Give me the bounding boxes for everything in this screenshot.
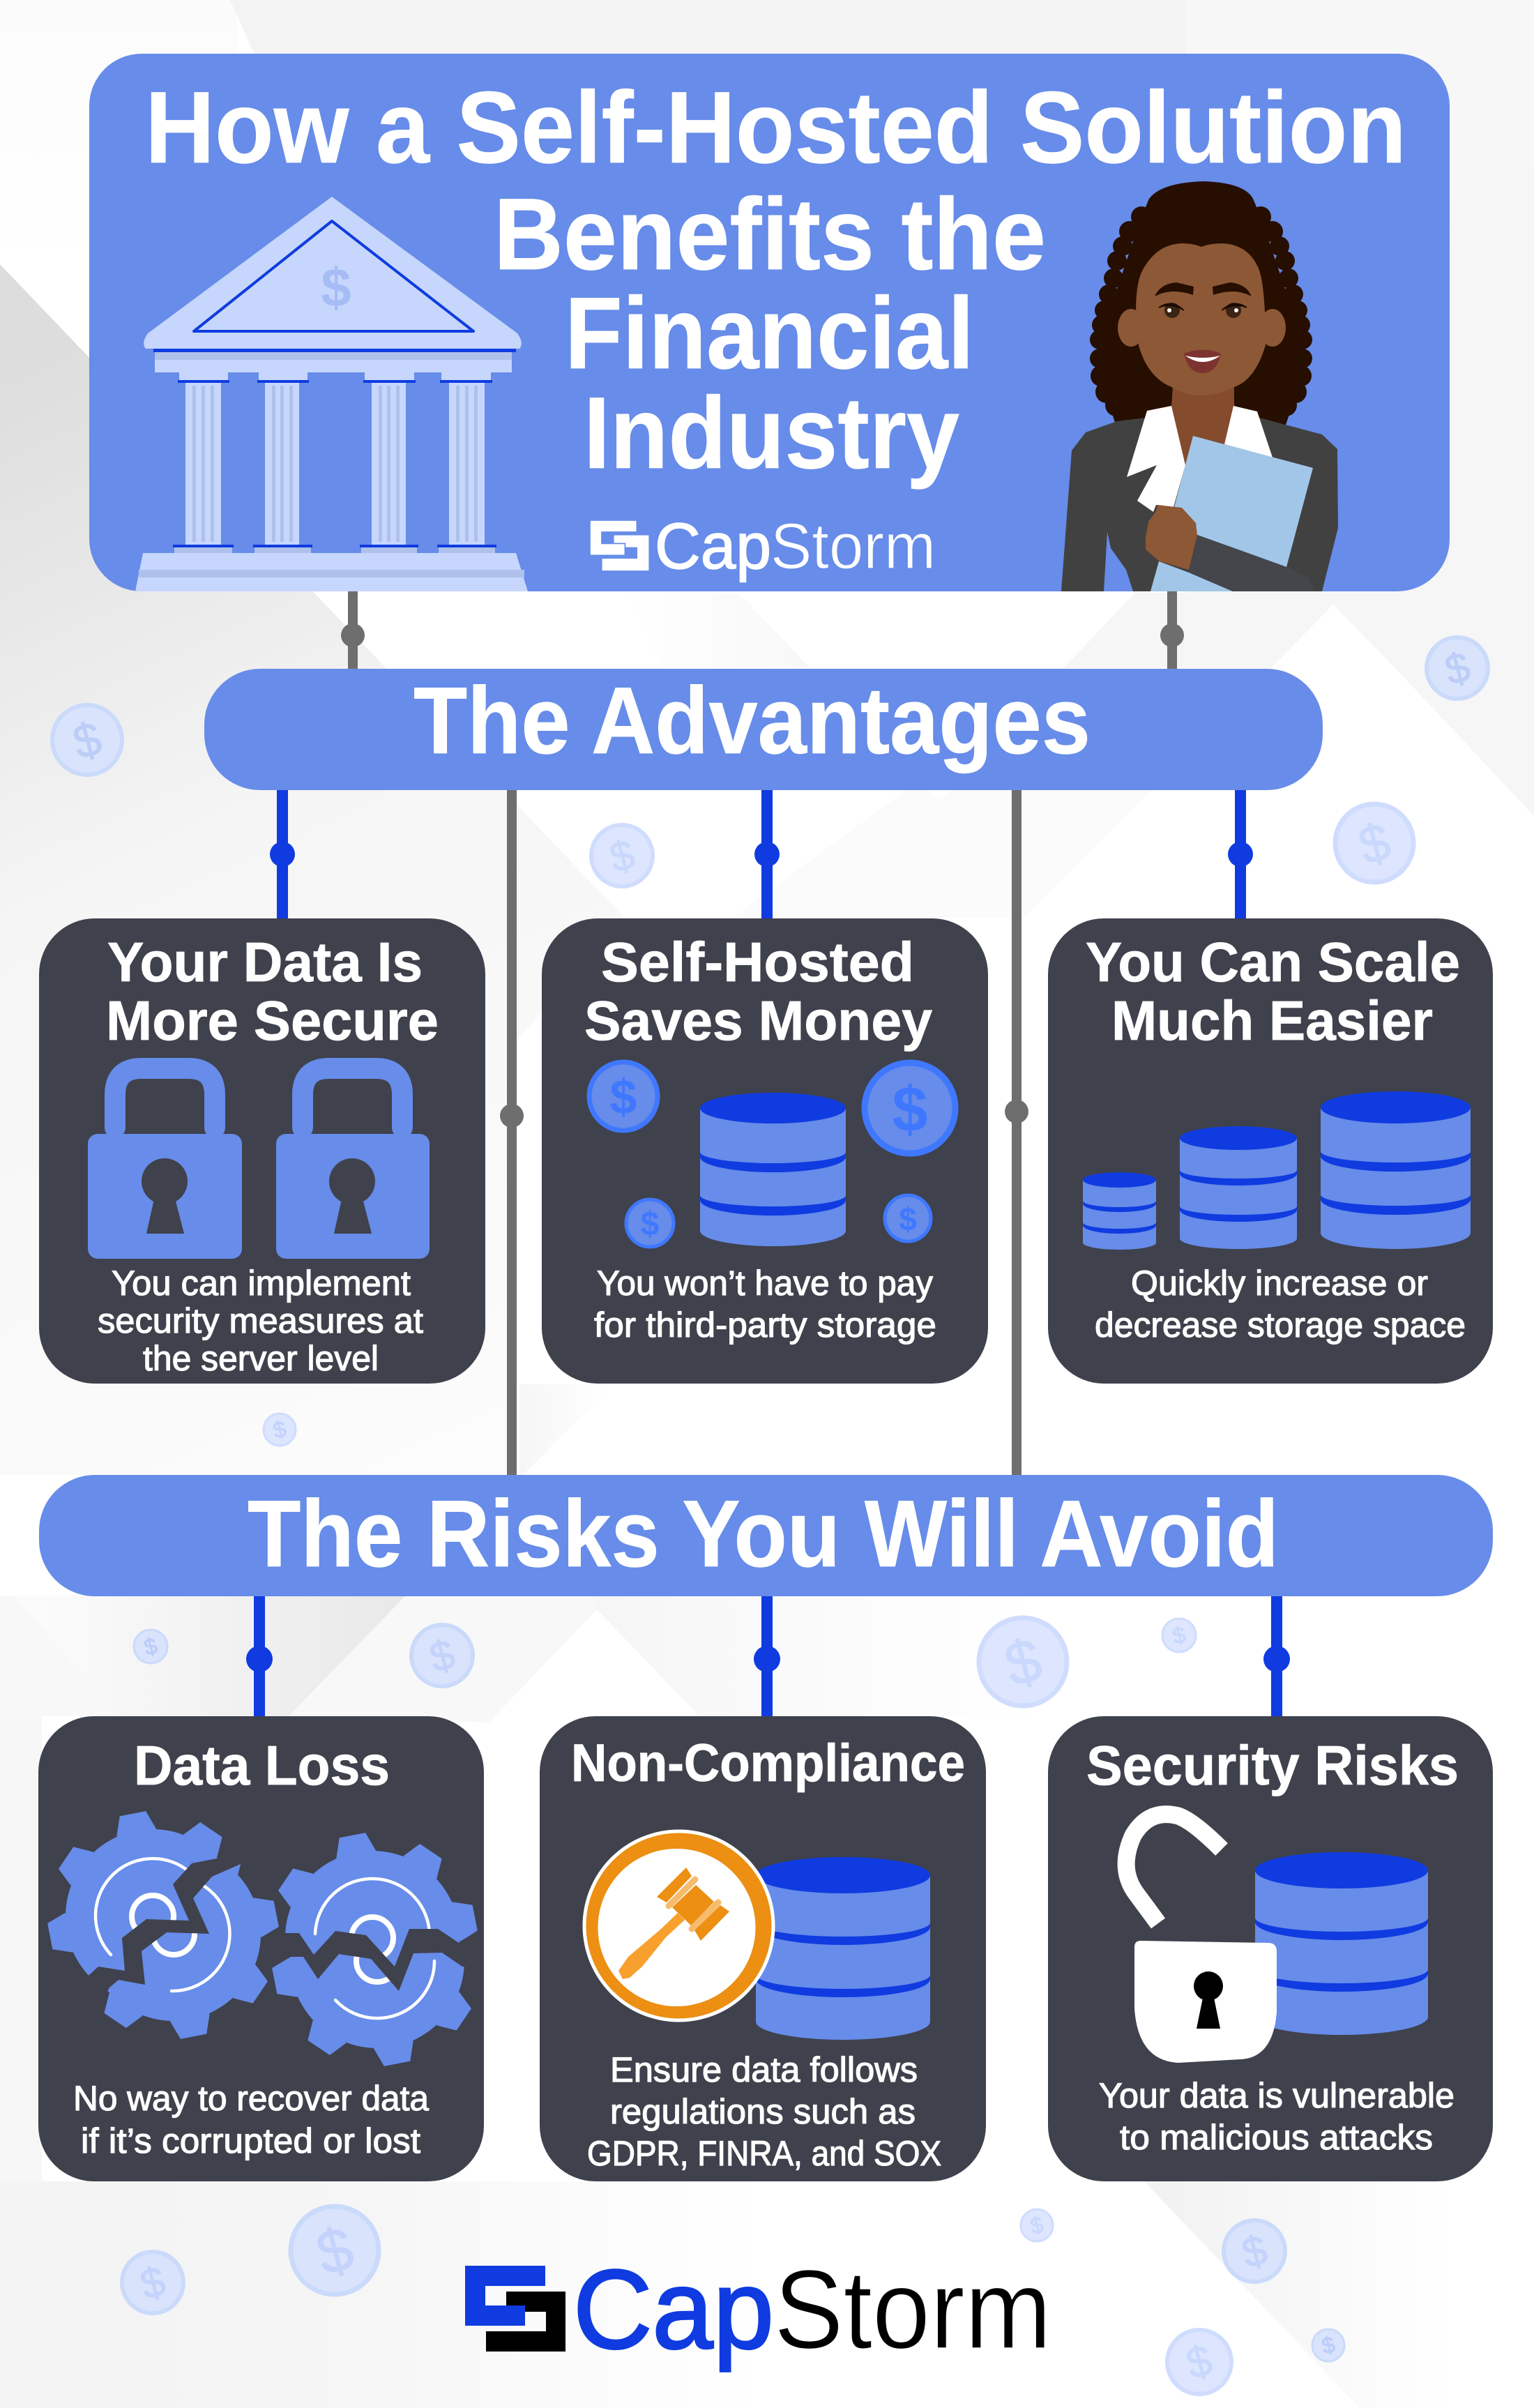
icon: coin: $	[1440, 643, 1475, 694]
panel: Data Loss	[38, 1716, 484, 2181]
icon: coin: $	[1353, 812, 1397, 877]
icon: coin: $	[68, 711, 107, 770]
description	[594, 1264, 936, 1345]
connector: gray line left title to advantages	[341, 586, 365, 673]
banner: The Advantages	[204, 667, 1323, 790]
icon: coin	[122, 2252, 183, 2313]
icon: coin	[1021, 2209, 1053, 2241]
icon: coin	[411, 1625, 473, 1686]
illustration: businesswoman holding folder	[1061, 181, 1338, 591]
heading: Data Loss	[134, 1734, 390, 1796]
description	[1095, 1264, 1466, 1345]
connector: blue line to card 2	[754, 785, 780, 924]
icon: broken gears	[46, 1810, 484, 2068]
panel: Security Risks	[1048, 1716, 1493, 2181]
description: security measures at	[98, 1301, 423, 1340]
icon: dollar coins: $	[610, 1070, 637, 1124]
icon: dollar coins: $	[899, 1201, 917, 1237]
connector: gray line advantages to risks right	[1005, 785, 1028, 1482]
icon: dollar coins: $	[641, 1206, 660, 1243]
icon: database	[756, 1857, 930, 2040]
logo: white CapStorm	[590, 510, 936, 582]
heading: Self-Hosted	[601, 931, 914, 993]
icon: two padlocks	[88, 1068, 430, 1259]
icon: coin: $	[271, 1416, 289, 1444]
connector: blue line to risk 3	[1263, 1590, 1290, 1722]
neck	[1171, 386, 1234, 465]
hair	[1090, 181, 1312, 427]
connector: blue line to card 3	[1228, 785, 1253, 924]
mouth	[1184, 350, 1221, 373]
panel: title banner	[89, 54, 1450, 591]
heading	[106, 931, 439, 1052]
panel: Self-Hosted Saves Money	[542, 918, 988, 1384]
title	[145, 70, 1406, 490]
eyes	[1159, 303, 1247, 318]
icon: coin: $	[142, 1633, 160, 1660]
description: if it’s corrupted or lost	[81, 2121, 420, 2160]
description: You can implement	[112, 1264, 411, 1303]
icon: coin: $	[1028, 2211, 1046, 2239]
icon: coin	[291, 2206, 379, 2294]
jacket	[1061, 418, 1338, 591]
description: regulations such as	[610, 2092, 916, 2131]
heading	[1086, 931, 1460, 1052]
icon: coin	[134, 1630, 167, 1663]
description: You won’t have to pay	[597, 1264, 933, 1303]
description	[98, 1264, 423, 1378]
icon: bank building: $	[321, 257, 351, 318]
icon: coin: $	[1237, 2226, 1272, 2277]
description: to malicious attacks	[1120, 2118, 1433, 2157]
icon: coin: $	[425, 1630, 460, 1681]
description: GDPR, FINRA, and SOX	[587, 2134, 941, 2173]
sleeve	[1189, 535, 1314, 591]
description	[587, 2050, 941, 2173]
icon: coin	[591, 825, 653, 886]
folder	[1150, 436, 1313, 591]
icon: coin: $	[1182, 2336, 1217, 2388]
heading: More Secure	[106, 990, 439, 1052]
banner: The Advantages: The Advantages	[413, 667, 1091, 773]
connector: gray line right title to advantages	[1160, 586, 1184, 673]
icon: coin	[1167, 2330, 1231, 2394]
icon: coin: $	[998, 1624, 1049, 1700]
icon: coin: $	[310, 2213, 360, 2289]
banner: The Risks You Will Avoid	[39, 1475, 1493, 1596]
icon: coin	[979, 1618, 1067, 1706]
icon: dollar coins	[589, 1062, 955, 1247]
description: decrease storage space	[1095, 1305, 1466, 1345]
connector: blue line to risk 2	[754, 1590, 780, 1722]
icon: coin	[1312, 2329, 1344, 2361]
description	[73, 2079, 429, 2160]
heading	[584, 931, 932, 1052]
icon: three growing databases	[1083, 1091, 1471, 1250]
panel: Your Data Is More Secure	[39, 918, 485, 1384]
heading: You Can Scale	[1086, 931, 1460, 993]
icon: coin: $	[1170, 1621, 1188, 1649]
logo: CapStorm footer: Cap	[573, 2247, 774, 2372]
icon: database	[1255, 1852, 1428, 2035]
title: Industry	[584, 376, 959, 490]
title: How a Self-Hosted Solution	[145, 70, 1406, 184]
icon: open padlock	[1126, 1815, 1277, 2063]
description: the server level	[143, 1339, 379, 1378]
coins: decorative background money	[52, 637, 1488, 2394]
description: Quickly increase or	[1131, 1264, 1428, 1303]
eyebrows	[1155, 282, 1252, 296]
icon: coin: $	[135, 2257, 170, 2308]
icon: coin	[1335, 804, 1413, 882]
heading: Your Data Is	[107, 931, 423, 993]
collar	[1127, 406, 1273, 512]
logo: white CapStorm: Storm	[770, 510, 936, 582]
icon: coin	[52, 705, 122, 775]
connector: blue line to risk 1	[246, 1590, 273, 1722]
panel: You Can Scale Much Easier	[1048, 918, 1493, 1384]
logo: CapStorm footer	[465, 2247, 1051, 2372]
banner: The Risks You Will Avoid: The Risks You Will Avoid	[248, 1481, 1279, 1587]
title: Benefits the	[494, 177, 1046, 291]
logo: white CapStorm: Cap	[655, 510, 771, 582]
panel: Non-Compliance	[540, 1716, 986, 2181]
connector: gray line advantages to risks left	[500, 785, 524, 1482]
connector: blue line to card 1	[270, 785, 295, 924]
description: for third-party storage	[594, 1305, 936, 1345]
icon: coin	[1224, 2220, 1285, 2282]
logo: CapStorm footer: Storm	[774, 2247, 1051, 2372]
icon: database	[700, 1093, 846, 1246]
hand	[1146, 505, 1197, 570]
description: Ensure data follows	[610, 2050, 918, 2089]
icon: coin	[1427, 637, 1488, 699]
heading: Security Risks	[1086, 1734, 1459, 1796]
description: No way to recover data	[73, 2079, 429, 2118]
icon: coin: $	[1319, 2331, 1337, 2359]
icon: coin: $	[605, 831, 639, 881]
heading: Much Easier	[1111, 990, 1433, 1052]
heading: Saves Money	[584, 990, 932, 1052]
description: Your data is vulnerable	[1099, 2076, 1455, 2115]
description	[1099, 2076, 1455, 2157]
face	[1118, 243, 1286, 395]
icon: dollar coins: $	[892, 1074, 928, 1145]
icon: gavel badge	[583, 1830, 775, 2022]
title: Financial	[565, 276, 974, 390]
heading: Non-Compliance	[571, 1734, 965, 1793]
icon: coin	[264, 1414, 296, 1446]
icon: bank building	[135, 197, 528, 591]
icon: coin	[1162, 1619, 1196, 1652]
